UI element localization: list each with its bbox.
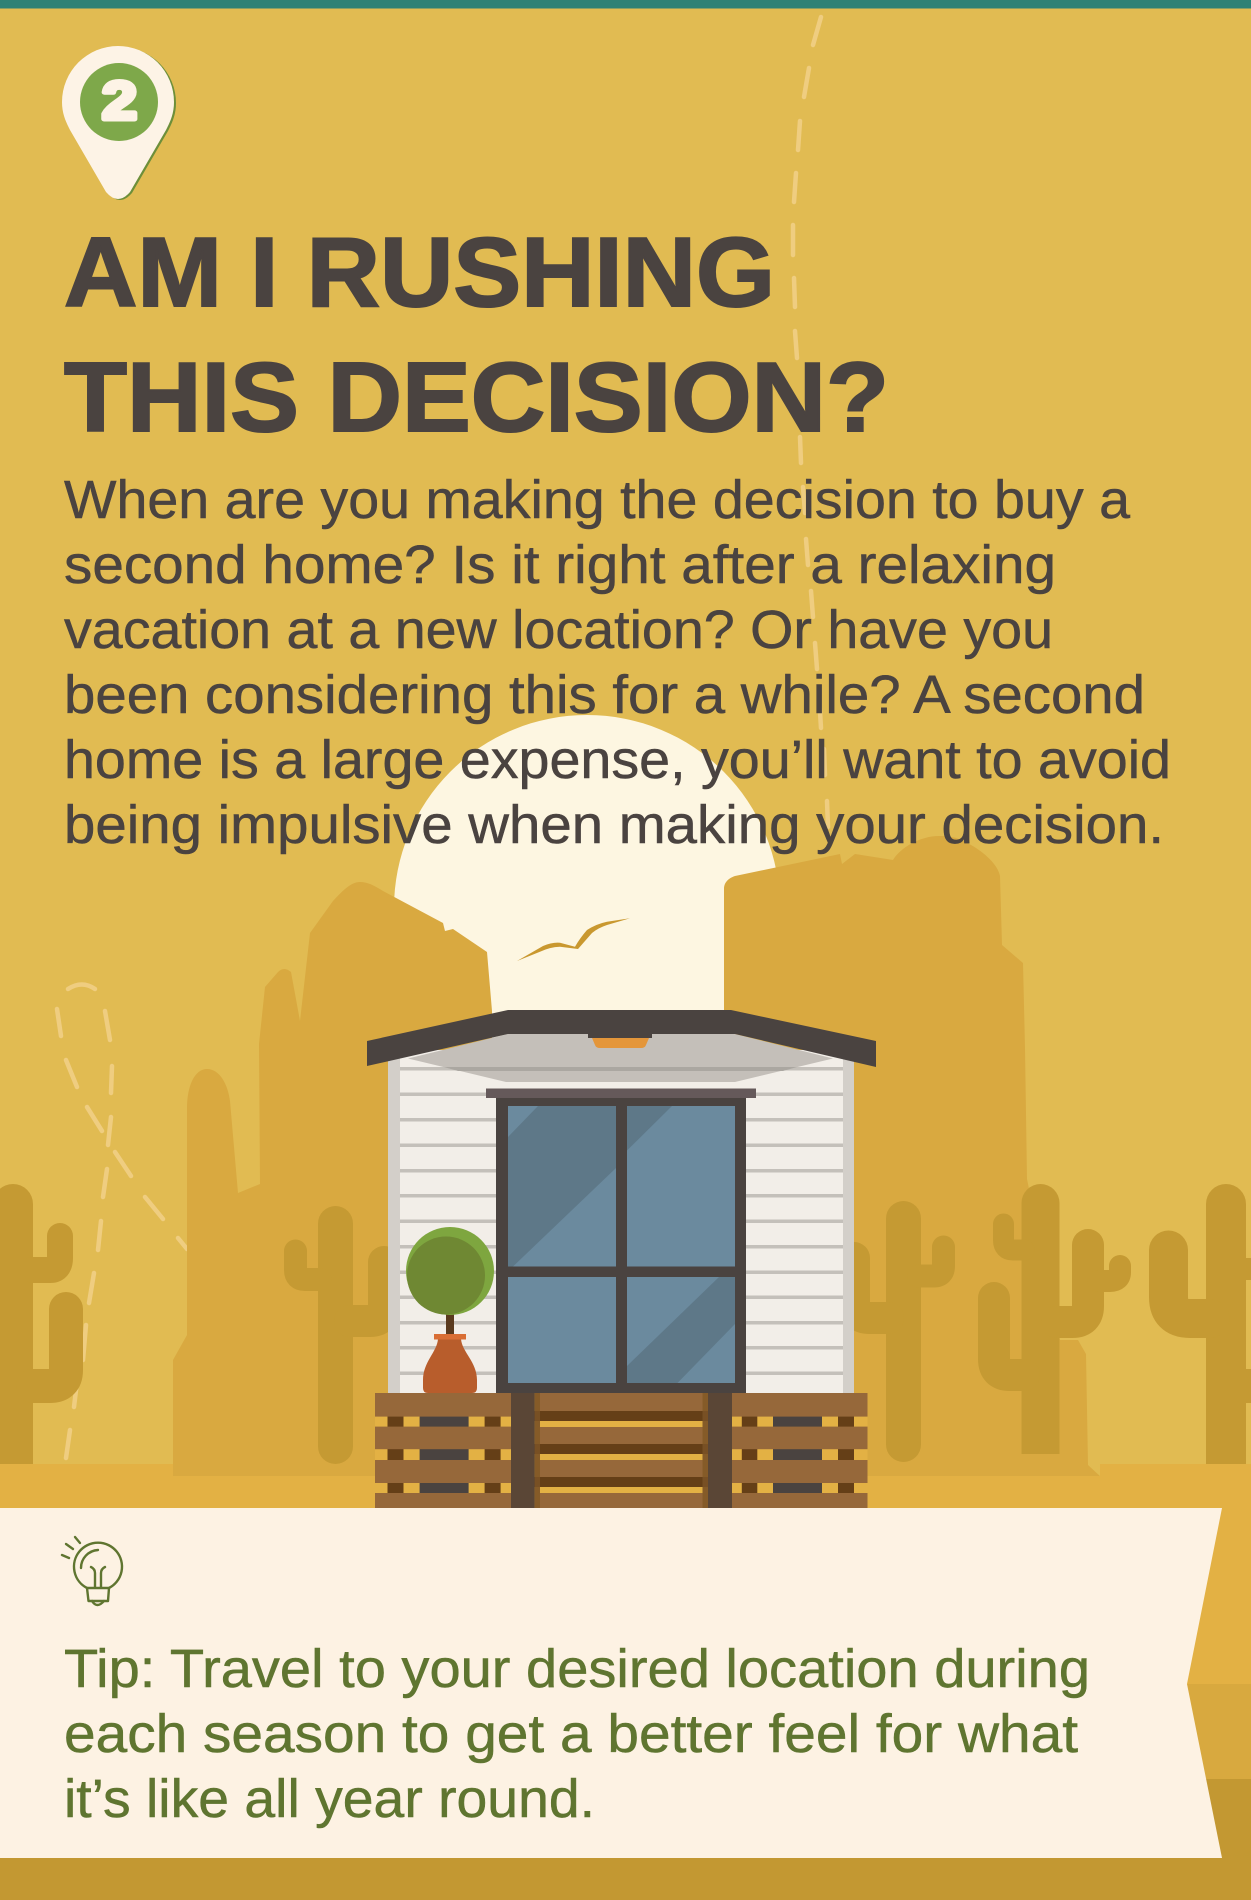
lower ground bands [0,1684,1251,1900]
siding lines [400,1067,843,1375]
window lintel [486,1088,756,1098]
top teal bar [0,0,1251,8]
window frame [496,1098,746,1393]
wall siding [400,1050,843,1393]
body text: home is a large expense, you’ll want to avoid [64,730,1171,790]
body text: second home? Is it right after a relaxing [64,535,1056,595]
window panes [508,1106,735,1383]
dashed flight path: lower left loop [57,984,187,1458]
body text: being impulsive when making your decision. [64,795,1164,855]
dashed flight path: upper right [793,17,828,827]
soffit shadow stripe [444,1067,797,1071]
porch: right railing gaps [732,1416,868,1493]
tip text: it’s like all year round. [64,1769,595,1829]
location pin with number [62,46,176,200]
bird [517,918,630,961]
cactus: right of house [854,1218,944,1444]
body text: vacation at a new location? Or have you [64,600,1053,660]
roof soffit [408,1034,833,1082]
porch: left railing gaps [375,1416,511,1493]
body text: When are you making the decision to buy a [64,470,1131,530]
sun [394,715,780,1101]
body text [64,470,1171,855]
potted plant [406,1227,494,1393]
house [367,1010,876,1508]
title: AM I RUSHING [64,217,775,327]
title [64,217,889,452]
tip text: each season to get a better feel for what [64,1704,1078,1764]
cactus: far right [1168,1184,1251,1464]
left rock formation [173,882,492,1476]
porch: planks [375,1393,868,1508]
cactus: large centre right [994,1184,1120,1454]
ground [0,1476,1251,1684]
tip text: Tip: Travel to your desired location during [64,1639,1090,1699]
cactus: left of house [296,1224,384,1446]
icon: light bulb [62,1537,122,1605]
porch light [588,1034,652,1048]
tip banner [0,1508,1222,1858]
steps [534,1393,709,1508]
roof [367,1010,876,1067]
tip text [64,1639,1090,1829]
window reflections [508,1106,735,1383]
ground: left segment [0,1464,173,1494]
cactus: far left [0,1184,66,1464]
right rock formation [724,836,1102,1478]
title: THIS DECISION? [64,342,889,452]
porch posts [511,1393,732,1508]
wall trim [388,1050,854,1393]
body text: been considering this for a while? A second [64,665,1145,725]
location pin with number: 2 [102,71,137,131]
ground: right segment [1100,1464,1251,1684]
